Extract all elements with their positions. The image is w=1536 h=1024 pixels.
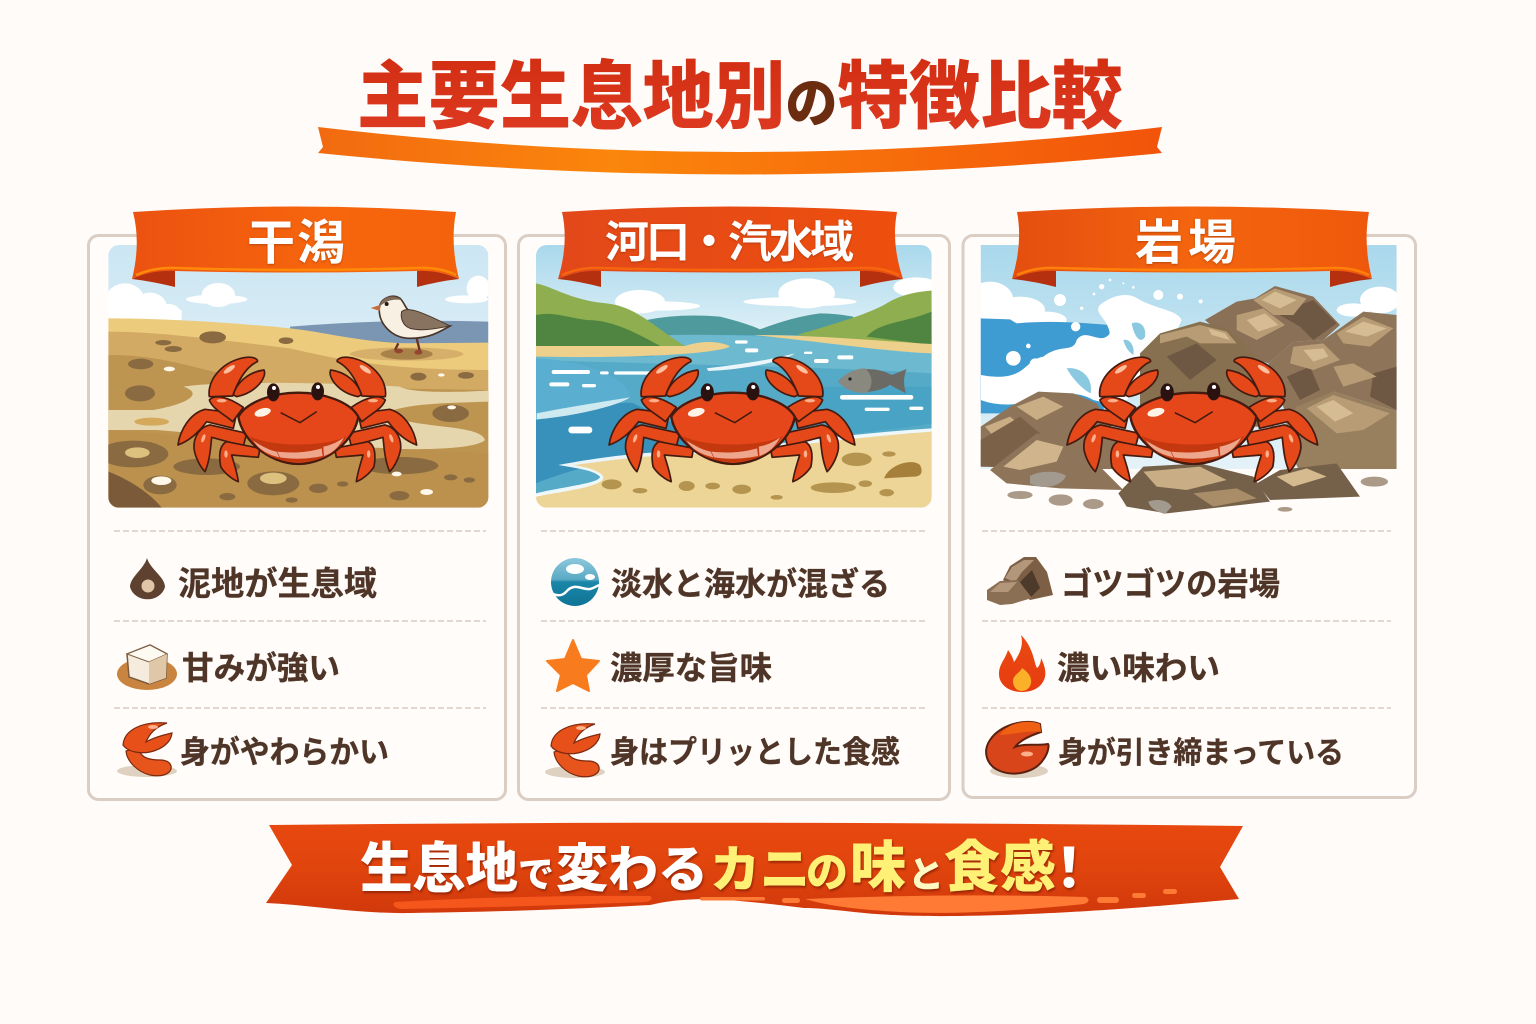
card frame: 岩場 xyxy=(963,236,1416,798)
row: ゴツゴツの岩場 xyxy=(987,557,1280,605)
bottom banner xyxy=(266,823,1243,916)
foreground rocks xyxy=(990,433,1388,514)
header ribbon: 干潟 xyxy=(132,206,459,287)
row: 淡水と海水が混ざる xyxy=(551,558,890,606)
row: 身はプリッとした食感 xyxy=(545,724,900,778)
slogan: 味 xyxy=(850,836,906,899)
divider top xyxy=(114,530,486,532)
slogan: の xyxy=(806,849,848,896)
slogan: 生息地 xyxy=(360,839,518,899)
bird xyxy=(371,296,450,355)
panel: 岩場 xyxy=(963,206,1416,798)
crab character xyxy=(178,357,417,482)
heading: 干潟: 干潟 xyxy=(247,217,345,270)
divider xyxy=(114,707,486,709)
slogan: 食感 xyxy=(944,836,1056,899)
row: 濃厚な旨味 xyxy=(547,640,772,691)
scene: estuary xyxy=(536,245,940,508)
text: 身はプリッとした食感: 身はプリッとした食感 xyxy=(610,735,900,770)
icon: mud drop xyxy=(130,558,165,599)
header ribbon: 岩場 xyxy=(1012,206,1372,287)
scene: tidal flat xyxy=(98,245,490,508)
slogan: カニ xyxy=(710,842,810,898)
panel: 河口・汽水域 xyxy=(518,206,950,800)
text: 濃い味わい: 濃い味わい xyxy=(1057,650,1220,686)
slogan: わる xyxy=(608,842,708,898)
slogan: と xyxy=(908,854,944,895)
scene: rocky shore xyxy=(967,245,1400,514)
divider xyxy=(114,620,486,622)
text: 身が引き締まっている: 身が引き締まっている xyxy=(1058,736,1344,770)
icon: rocks xyxy=(987,557,1053,605)
title underline ribbon xyxy=(318,127,1162,174)
divider xyxy=(982,707,1391,709)
banner shape xyxy=(266,823,1243,916)
slogan: 変 xyxy=(556,841,608,899)
icon: flame xyxy=(999,635,1045,692)
card frame: 河口・汽水域 xyxy=(518,236,950,800)
panel: 干潟 xyxy=(88,206,506,800)
slogan: で xyxy=(518,854,554,895)
divider top xyxy=(982,530,1391,532)
text: 甘みが強い: 甘みが強い xyxy=(182,650,340,686)
icon: sugar cube xyxy=(117,645,177,690)
icon: soft claw xyxy=(117,723,177,777)
row: 泥地が生息域 xyxy=(130,558,377,602)
crab character xyxy=(1067,357,1318,482)
card frame: 干潟 xyxy=(88,236,506,800)
text: ゴツゴツの岩場: ゴツゴツの岩場 xyxy=(1061,566,1280,602)
slogan: ！ xyxy=(1042,839,1096,899)
crab character xyxy=(609,357,855,482)
divider xyxy=(982,620,1391,622)
divider xyxy=(541,707,927,709)
fish xyxy=(838,368,907,393)
icon: firm claw xyxy=(545,724,605,778)
heading: 岩場: 岩場 xyxy=(1135,217,1236,270)
divider top xyxy=(541,530,927,532)
row: 身が引き締まっている xyxy=(986,722,1344,778)
row: 身がやわらかい xyxy=(117,723,389,777)
header ribbon: 河口・汽水域 xyxy=(558,206,903,287)
text: 身がやわらかい: 身がやわらかい xyxy=(180,735,389,770)
icon: star xyxy=(547,640,599,691)
text: 淡水と海水が混ざる: 淡水と海水が混ざる xyxy=(611,566,890,602)
row: 濃い味わい xyxy=(999,635,1220,692)
banner highlights xyxy=(393,889,1177,913)
text: 泥地が生息域: 泥地が生息域 xyxy=(178,565,377,602)
heading: 河口・汽水域: 河口・汽水域 xyxy=(605,218,854,267)
title: 主要生息地別の特徴比較 xyxy=(357,55,1123,138)
text: 濃厚な旨味: 濃厚な旨味 xyxy=(610,650,772,686)
icon: water xyxy=(551,558,599,606)
row: 甘みが強い xyxy=(117,645,340,690)
divider xyxy=(541,620,927,622)
icon: tight claw xyxy=(986,722,1048,778)
